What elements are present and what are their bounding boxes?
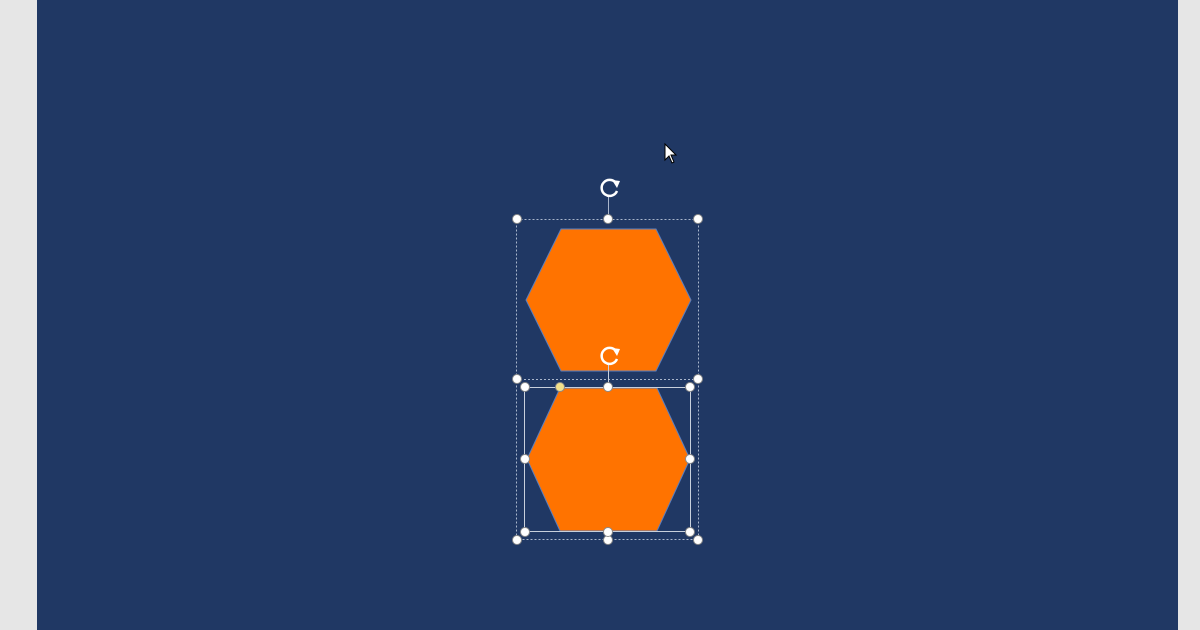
icon: rotate handle top bbox=[602, 180, 620, 196]
hexagon: top bbox=[526, 229, 691, 371]
hexagon: bottom bbox=[527, 388, 690, 531]
selection box: group bbox=[512, 196, 702, 544]
icon: rotate handle bottom bbox=[602, 348, 620, 364]
icon: mouse cursor bbox=[665, 144, 676, 163]
selection box: bottom hexagon bbox=[520, 364, 694, 536]
